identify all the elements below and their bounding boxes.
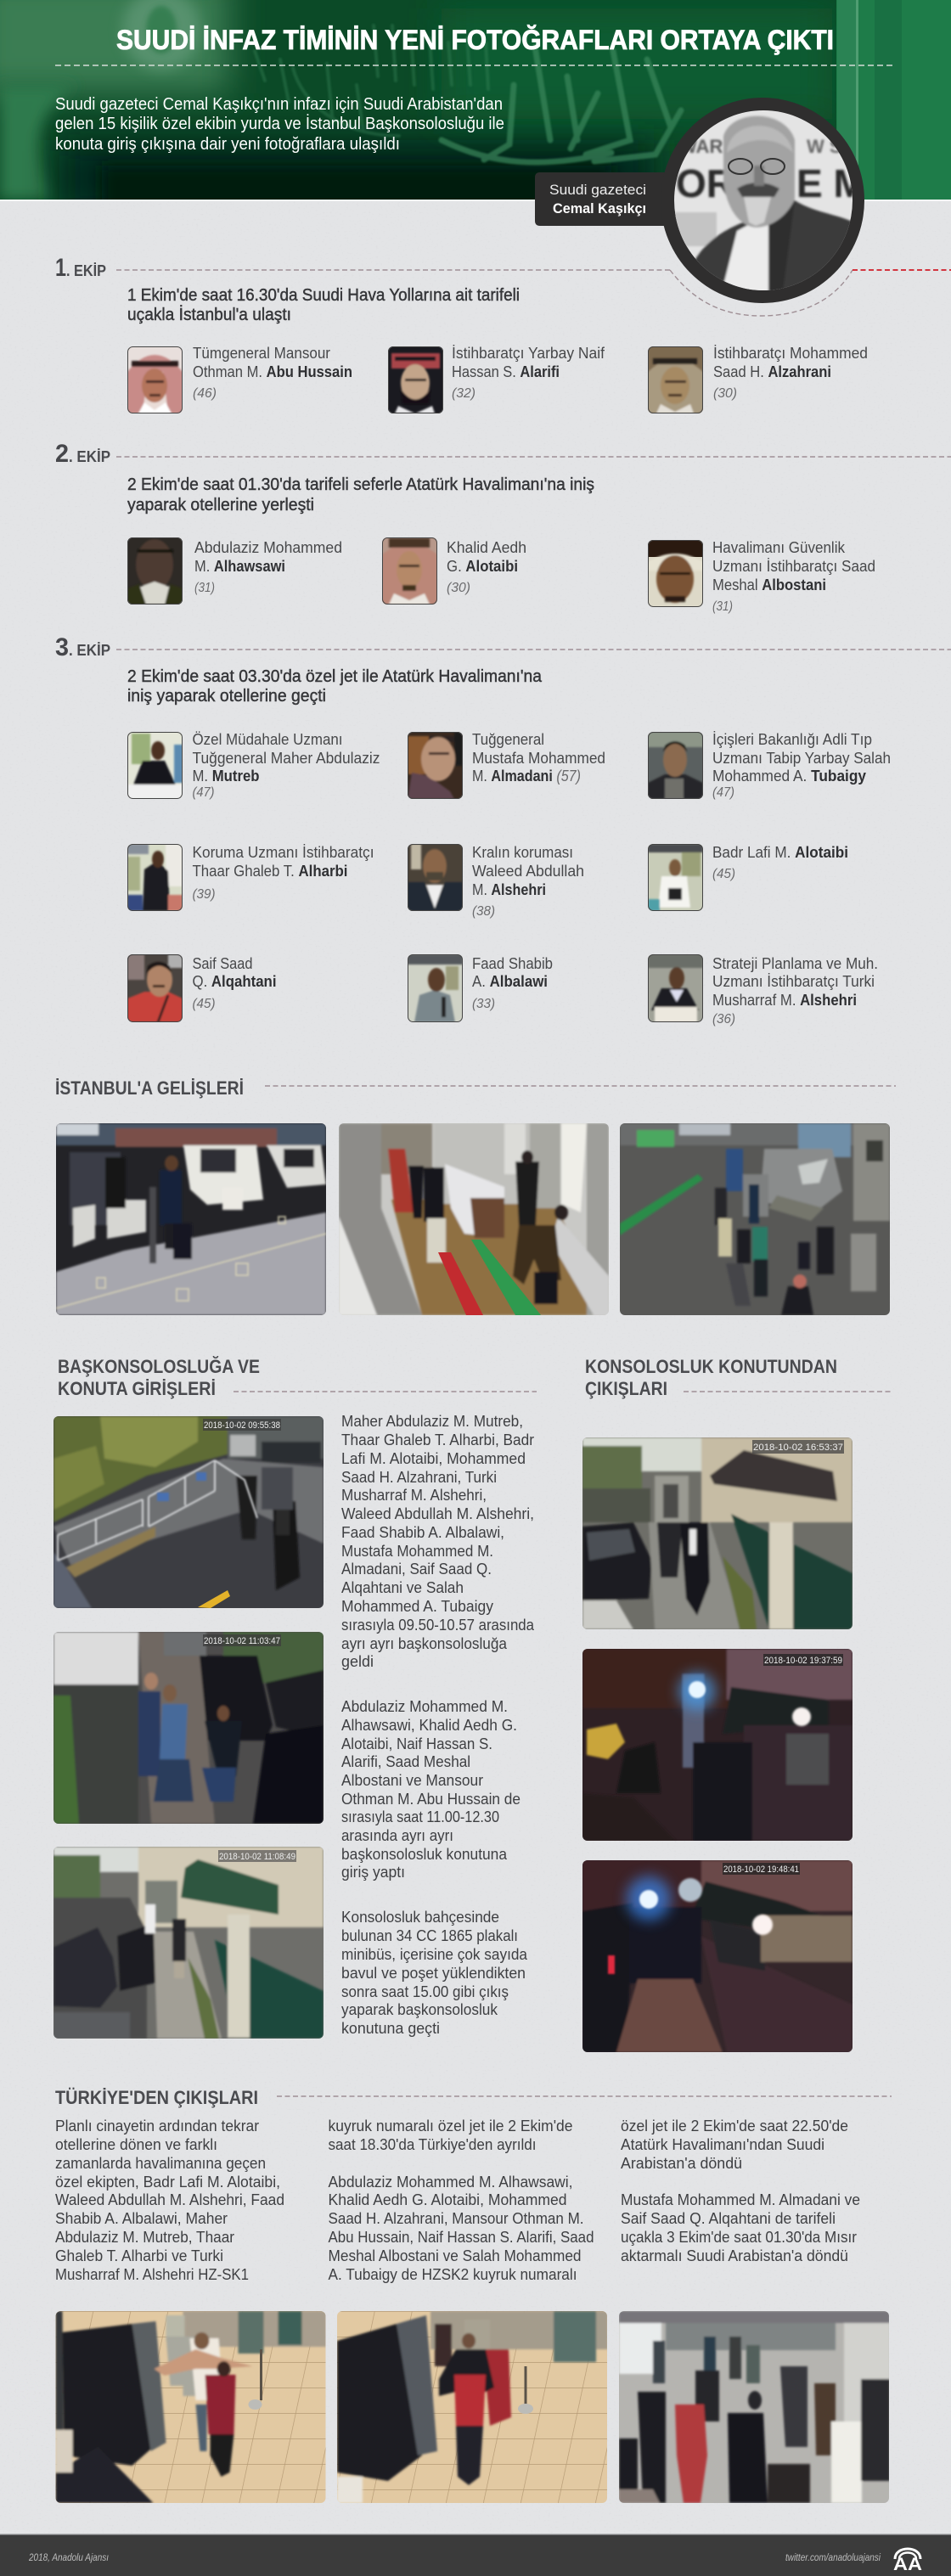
text column 2: Abu Hussain, Naif Hassan S. Alarifi, Saad (328, 2229, 594, 2246)
text column 1: özel ekipten, Badr Lafi M. Alotaibi, (55, 2174, 280, 2191)
title: SUUDİ İNFAZ TİMİNİN YENİ FOTOĞRAFLARI ORTAYA ÇIKTI (116, 25, 834, 55)
team 2 description: yaparak otellerine yerleşti (127, 496, 314, 515)
name: Alshehri (Waleed): Kralın koruması (472, 844, 573, 861)
paragraph 3: yaparak başkonsolosluk (341, 2001, 498, 2018)
text column 3: Atatürk Havalimanı'ndan Suudi (621, 2136, 824, 2153)
text column 3: Arabistan'a döndü (621, 2155, 742, 2172)
team 1 description: 1 Ekim'de saat 16.30'da Suudi Hava Yollarına ait tarifeli (127, 286, 520, 305)
name: Albalawi: A. Albalawi (472, 973, 548, 990)
photo: Tubaigy (648, 732, 703, 799)
text column 3: Saif Saad Q. Alqahtani de tarifeli (621, 2210, 836, 2227)
text column 2: Abdulaziz Mohammed M. Alhawsawi, (328, 2174, 572, 2191)
team 1 description (127, 286, 520, 324)
paragraph 2: Alhawsawi, Khalid Aedh G. (341, 1717, 517, 1734)
name: Alarifi: (32) (452, 386, 476, 401)
paragraph 3: bavul ve poşet yüklendikten (341, 1965, 526, 1982)
paragraph 1: Lafi M. Alotaibi, Mohammed (341, 1450, 526, 1467)
paragraph 1: Almadani, Saif Saad Q. (341, 1561, 492, 1578)
header banner: Saudi flag (0, 0, 951, 217)
text column 2 (328, 2118, 594, 2283)
photo: Alshehri (Turki) (648, 954, 703, 1022)
photo: exit 16:53: 2018-10-02 16:53:37 (753, 1443, 843, 1453)
photo: exit 19:37 (582, 1649, 853, 1841)
name: Abu Hussain: Tümgeneral Mansour (193, 345, 330, 362)
photo: exit 16:53 (582, 1437, 853, 1629)
paragraph 1: Waleed Abdullah M. Alshehri, (341, 1505, 534, 1522)
footer bar (0, 2534, 951, 2576)
paragraph 2: Abdulaziz Mohammed M. (341, 1698, 508, 1715)
paragraph 2: sırasıyla saat 11.00-12.30 (341, 1808, 499, 1825)
heading: 2. EKİP: . EKİP (69, 448, 110, 465)
header bottom edge (0, 200, 951, 201)
photo: airport security (56, 1123, 326, 1315)
name: Albostani: Havalimanı Güvenlik (712, 539, 846, 556)
paragraph 1 (341, 1413, 535, 1670)
photo: arrivals hall (620, 1123, 890, 1315)
name: Alotaibi (Badr) (712, 844, 848, 881)
paragraph 2: Alotaibi, Naif Hassan S. (341, 1735, 492, 1752)
paragraph 2: giriş yaptı (341, 1864, 405, 1881)
text column 3 (621, 2118, 860, 2264)
paragraph 2: başkonsolosluk konutuna (341, 1846, 508, 1863)
name: Alshehri (Turki): (36) (712, 1012, 735, 1026)
photo: Alotaibi (Khalid) (382, 537, 437, 605)
name: Almadani: Tuğgeneral (472, 731, 544, 748)
name: Alzahrani (713, 345, 868, 401)
paragraph 1: Saad H. Alzahrani, Turki (341, 1469, 497, 1486)
name: Mutreb: (47) (192, 785, 214, 800)
icon: AA logo (893, 2549, 922, 2574)
section: exits from the consulate residence (582, 1356, 892, 2052)
team 2 description (127, 475, 594, 515)
photo: entry 11:08: 2018-10-02 11:08:49 (219, 1852, 295, 1862)
photo: Albalawi (408, 954, 463, 1022)
name: Tubaigy: İçişleri Bakanlığı Adli Tıp (712, 731, 872, 748)
name: Alarifi (452, 345, 605, 401)
photo: Alhawsawi (127, 537, 183, 605)
name: Alshehri (Waleed): (38) (472, 904, 495, 919)
name: Alarifi: İstihbaratçı Yarbay Naif (452, 345, 605, 362)
text column 2: Khalid Aedh G. Alotaibi, Mohammed (328, 2191, 567, 2208)
photo: passport desk (339, 1123, 609, 1315)
photo: entry 09:55 (53, 1416, 324, 1608)
team 3 description (127, 667, 543, 706)
name: Tubaigy (712, 731, 891, 800)
photo: entry 09:55: 2018-10-02 09:55:38 (204, 1420, 280, 1431)
name: Albostani: (31) (712, 599, 733, 614)
name: Alshehri (Waleed) (472, 844, 584, 919)
name: Alotaibi (Badr): (45) (712, 867, 735, 881)
text column 3: Mustafa Mohammed M. Almadani ve (621, 2191, 860, 2208)
text column 1: zamanlarda havalimanına geçen (55, 2155, 266, 2172)
photo: Almadani (408, 732, 463, 799)
heading: 2. EKİP: 2 (55, 440, 69, 468)
text column 1: Planlı cinayetin ardından tekrar (55, 2118, 259, 2134)
heading: Türkiye'den çıkışları: TÜRKİYE'DEN ÇIKIŞLARI (55, 2087, 258, 2108)
name: Alzahrani: Saad H. Alzahrani (713, 363, 831, 380)
name: Albalawi: Faad Shabib (472, 955, 553, 972)
text column 1 (55, 2118, 284, 2283)
photo: Mutreb (127, 732, 183, 799)
portrait: Cemal Kaşıkçı: E M (796, 161, 866, 205)
name: Alshehri (Waleed): M. Alshehri (472, 881, 546, 898)
team 1 description: uçakla İstanbul'a ulaştı (127, 305, 291, 324)
name: Abu Hussain: Othman M. Abu Hussain (193, 363, 352, 380)
paragraph 1: Alqahtani ve Salah (341, 1579, 464, 1596)
name: Tubaigy: Mohammed A. Tubaigy (712, 768, 866, 785)
name: Alshehri (Turki): Musharraf M. Alshehri (712, 992, 857, 1009)
icon: AA logo: AA (893, 2555, 922, 2574)
name: Albostani: Uzmanı İstihbaratçı Saad (712, 558, 875, 575)
portrait name label: Cemal Kaşıkçı (553, 200, 646, 217)
paragraph 1: Faad Shabib A. Albalawi, (341, 1524, 504, 1541)
section: team 2 (55, 440, 951, 614)
photo: entry 11:03 (53, 1632, 324, 1824)
paragraph 3: Konsolosluk bahçesinde (341, 1909, 499, 1926)
text column 2: saat 18.30'da Türkiye'den ayrıldı (328, 2136, 537, 2153)
paragraph 3: minibüs, içerisine çok sayıda (341, 1946, 528, 1963)
name: Mutreb: Özel Müdahale Uzmanı (192, 731, 343, 748)
photo: Albostani (648, 540, 703, 607)
name: Alshehri (Turki): Strateji Planlama ve Muh. (712, 955, 878, 972)
name: Alzahrani: İstihbaratçı Mohammed (713, 345, 868, 362)
portrait name label (535, 172, 679, 226)
name: Alhawsawi (194, 539, 342, 595)
section: arrivals in Istanbul (55, 1077, 896, 1315)
heading: exits (585, 1356, 837, 1399)
name: Mutreb (192, 731, 380, 800)
heading: İstanbul'a gelişleri: İSTANBUL'A GELİŞLERİ (55, 1077, 244, 1099)
text column 1: Waleed Abdullah M. Alshehri, Faad (55, 2191, 284, 2208)
text column 3: aktarmalı Suudi Arabistan'a döndü (621, 2247, 848, 2264)
paragraph 3: konutuna geçti (341, 2020, 440, 2037)
paragraph 1: Thaar Ghaleb T. Alharbi, Badr (341, 1431, 534, 1448)
name: Alqahtani (192, 955, 277, 1011)
name: Alotaibi (Khalid) (447, 539, 526, 595)
section: consulate and residence entries (53, 1356, 537, 2039)
name: Alhawsawi: M. Alhawsawi (194, 558, 285, 575)
text column 1: Shabib A. Albalawi, Maher (55, 2210, 228, 2227)
name: Albostani: Meshal Albostani (712, 577, 826, 593)
section: team 3 (55, 633, 951, 1026)
name: Alshehri (Waleed): Waleed Abdullah (472, 863, 584, 880)
photo: entry 11:08 (53, 1847, 324, 2039)
name: Alharbi (192, 844, 374, 902)
copyright: 2018, Anadolu Ajansı (28, 2551, 109, 2563)
paragraph 1: ayrı ayrı başkonsolosluğa (341, 1635, 508, 1652)
paragraph 1: Mohammed A. Tubaigy (341, 1598, 493, 1615)
name: Alharbi: (39) (192, 887, 216, 902)
entries text (341, 1413, 535, 2037)
text column 3: uçakla 3 Ekim'de saat 01.30'da Mısır (621, 2229, 857, 2246)
paragraph 2: arasında ayrı ayrı (341, 1827, 453, 1844)
intro text: konuta giriş çıkışına dair yeni fotoğraflara ulaşıldı (55, 135, 400, 154)
name: Alqahtani: Q. Alqahtani (192, 973, 277, 990)
paragraph 1: Mustafa Mohammed M. (341, 1543, 493, 1560)
name: Alshehri (Turki): Uzmanı İstihbaratçı Turki (712, 973, 875, 990)
heading: entries: KONUTA GİRİŞLERİ (58, 1378, 216, 1399)
photo: exit 19:48 (582, 1860, 853, 2052)
heading: exits: KONSOLOSLUK KONUTUNDAN (585, 1356, 837, 1377)
name: Abu Hussain: (46) (193, 386, 217, 401)
name: Alshehri (Turki) (712, 955, 878, 1026)
name: Mutreb: M. Mutreb (192, 768, 260, 785)
photo: Alzahrani (648, 346, 703, 413)
paragraph 1: Musharraf M. Alshehri, (341, 1487, 487, 1504)
heading: entries (58, 1356, 260, 1399)
name: Almadani: Mustafa Mohammed (472, 750, 605, 767)
intro text: Suudi gazeteci Cemal Kaşıkçı'nın infazı için Suudi Arabistan'dan (55, 95, 503, 114)
name: Alotaibi (Khalid): Khalid Aedh (447, 539, 526, 556)
name: Alhawsawi: (31) (194, 581, 215, 595)
photo: airport hall (619, 2311, 890, 2503)
text column 3: özel jet ile 2 Ekim'de saat 22.50'de (621, 2118, 848, 2134)
paragraph 3: bulunan 34 CC 1865 plakalı (341, 1927, 518, 1944)
heading: 2. EKİP (55, 440, 110, 468)
photo: Alotaibi (Badr) (648, 844, 703, 911)
name: Tubaigy: Uzmanı Tabip Yarbay Salah (712, 750, 891, 767)
title underline (55, 65, 896, 66)
text column 2: Saad H. Alzahrani, Mansour Othman M. (328, 2210, 584, 2227)
section: team 1 (55, 254, 868, 413)
name: Tubaigy: (47) (712, 785, 734, 800)
photo: entry 11:03: 2018-10-02 11:03:47 (204, 1636, 280, 1646)
name: Almadani: M. Almadani (57) (472, 768, 581, 785)
dashed ring around portrait (670, 270, 853, 316)
heading: 1. EKİP (55, 254, 106, 282)
portrait: Cemal Kaşıkçı: W S (807, 136, 842, 157)
paragraph 3: sonra saat 15.00 gibi çıkış (341, 1983, 509, 2000)
name: Alharbi: Koruma Uzmanı İstihbaratçı (192, 844, 374, 861)
paragraph 1: geldi (341, 1653, 374, 1670)
calligraphy on the flag (255, 25, 681, 162)
heading: 1. EKİP: . EKİP (66, 262, 106, 279)
section: departures from Türkiye (55, 2087, 892, 2503)
portrait name label: Suudi gazeteci (549, 182, 646, 198)
heading: 3. EKİP: 3 (55, 633, 69, 661)
name: Abu Hussain (193, 345, 352, 401)
heading: exits: ÇIKIŞLARI (585, 1378, 667, 1399)
name: Alarifi: Hassan S. Alarifi (452, 363, 560, 380)
name: Alqahtani: (45) (192, 997, 216, 1011)
photo: airport check 1 (56, 2311, 326, 2503)
text column 1: Musharraf M. Alshehri HZ-SK1 (55, 2266, 249, 2283)
text column 1: Abdulaziz M. Mutreb, Thaar (55, 2229, 234, 2246)
heading: entries: BAŞKONSOLOSLUĞA VE (58, 1356, 260, 1377)
text column 1: otellerine dönen ve farklı (55, 2136, 217, 2153)
intro text: gelen 15 kişilik özel ekibin yurda ve İstanbul Başkonsolosluğu ile (55, 114, 504, 133)
name: Alotaibi (Khalid): (30) (447, 581, 470, 595)
photo: exit 19:37: 2018-10-02 19:37:59 (764, 1656, 842, 1666)
name: Alqahtani: Saif Saad (192, 955, 253, 972)
name: Albostani (712, 539, 875, 614)
text column 2: Meshal Albostani ve Salah Mohammed (328, 2247, 581, 2264)
photo: Alharbi (127, 844, 183, 911)
photo: Abu Hussain (127, 346, 183, 413)
photo: exit 19:48: 2018-10-02 19:48:41 (723, 1865, 799, 1875)
portrait: Cemal Kaşıkçı (535, 98, 866, 306)
paragraph 2: Othman M. Abu Hussain de (341, 1791, 521, 1808)
name: Alzahrani: (30) (713, 386, 737, 401)
paragraph 2: Albostani ve Mansour (341, 1772, 483, 1789)
twitter link text: twitter.com/anadoluajansi (785, 2551, 881, 2563)
paragraph 2 (341, 1698, 521, 1881)
paragraph 1: sırasıyla 09.50-10.57 arasında (341, 1617, 535, 1634)
name: Alharbi: Thaar Ghaleb T. Alharbi (192, 863, 348, 880)
intro text (55, 95, 504, 154)
photo: airport check 2 (337, 2311, 608, 2503)
text column 2: A. Tubaigy de HZSK2 kuyruk numaralı (328, 2266, 577, 2283)
text column 1: Ghaleb T. Alharbi ve Turki (55, 2247, 223, 2264)
heading: 3. EKİP (55, 633, 110, 661)
portrait: Cemal Kaşıkçı: OR (676, 161, 734, 205)
photo: Alarifi (388, 346, 443, 413)
red dashed line (853, 269, 951, 271)
paragraph 2: Alarifi, Saad Meshal (341, 1753, 470, 1770)
portrait: Cemal Kaşıkçı: WAR (679, 136, 723, 157)
name: Mutreb: Tuğgeneral Maher Abdulaziz (192, 750, 380, 767)
name: Albalawi (472, 955, 553, 1011)
heading: 3. EKİP: . EKİP (69, 642, 110, 659)
paragraph 3 (341, 1909, 528, 2037)
heading: 1. EKİP: 1 (55, 254, 66, 282)
photo: Alshehri (Waleed) (408, 844, 463, 911)
photo: Alqahtani (127, 954, 183, 1022)
text column 2: kuyruk numaralı özel jet ile 2 Ekim'de (328, 2118, 572, 2134)
name: Almadani (472, 731, 605, 785)
name: Alotaibi (Badr): Badr Lafi M. Alotaibi (712, 844, 848, 861)
team 2 description: 2 Ekim'de saat 01.30'da tarifeli seferle Atatürk Havalimanı'na iniş (127, 475, 594, 494)
team 3 description: iniş yaparak otellerine geçti (127, 687, 326, 706)
paragraph 1: Maher Abdulaziz M. Mutreb, (341, 1413, 523, 1430)
name: Alhawsawi: Abdulaziz Mohammed (194, 539, 342, 556)
name: Alotaibi (Khalid): G. Alotaibi (447, 558, 518, 575)
name: Albalawi: (33) (472, 997, 495, 1011)
team 3 description: 2 Ekim'de saat 03.30'da özel jet ile Atatürk Havalimanı'na (127, 667, 543, 686)
